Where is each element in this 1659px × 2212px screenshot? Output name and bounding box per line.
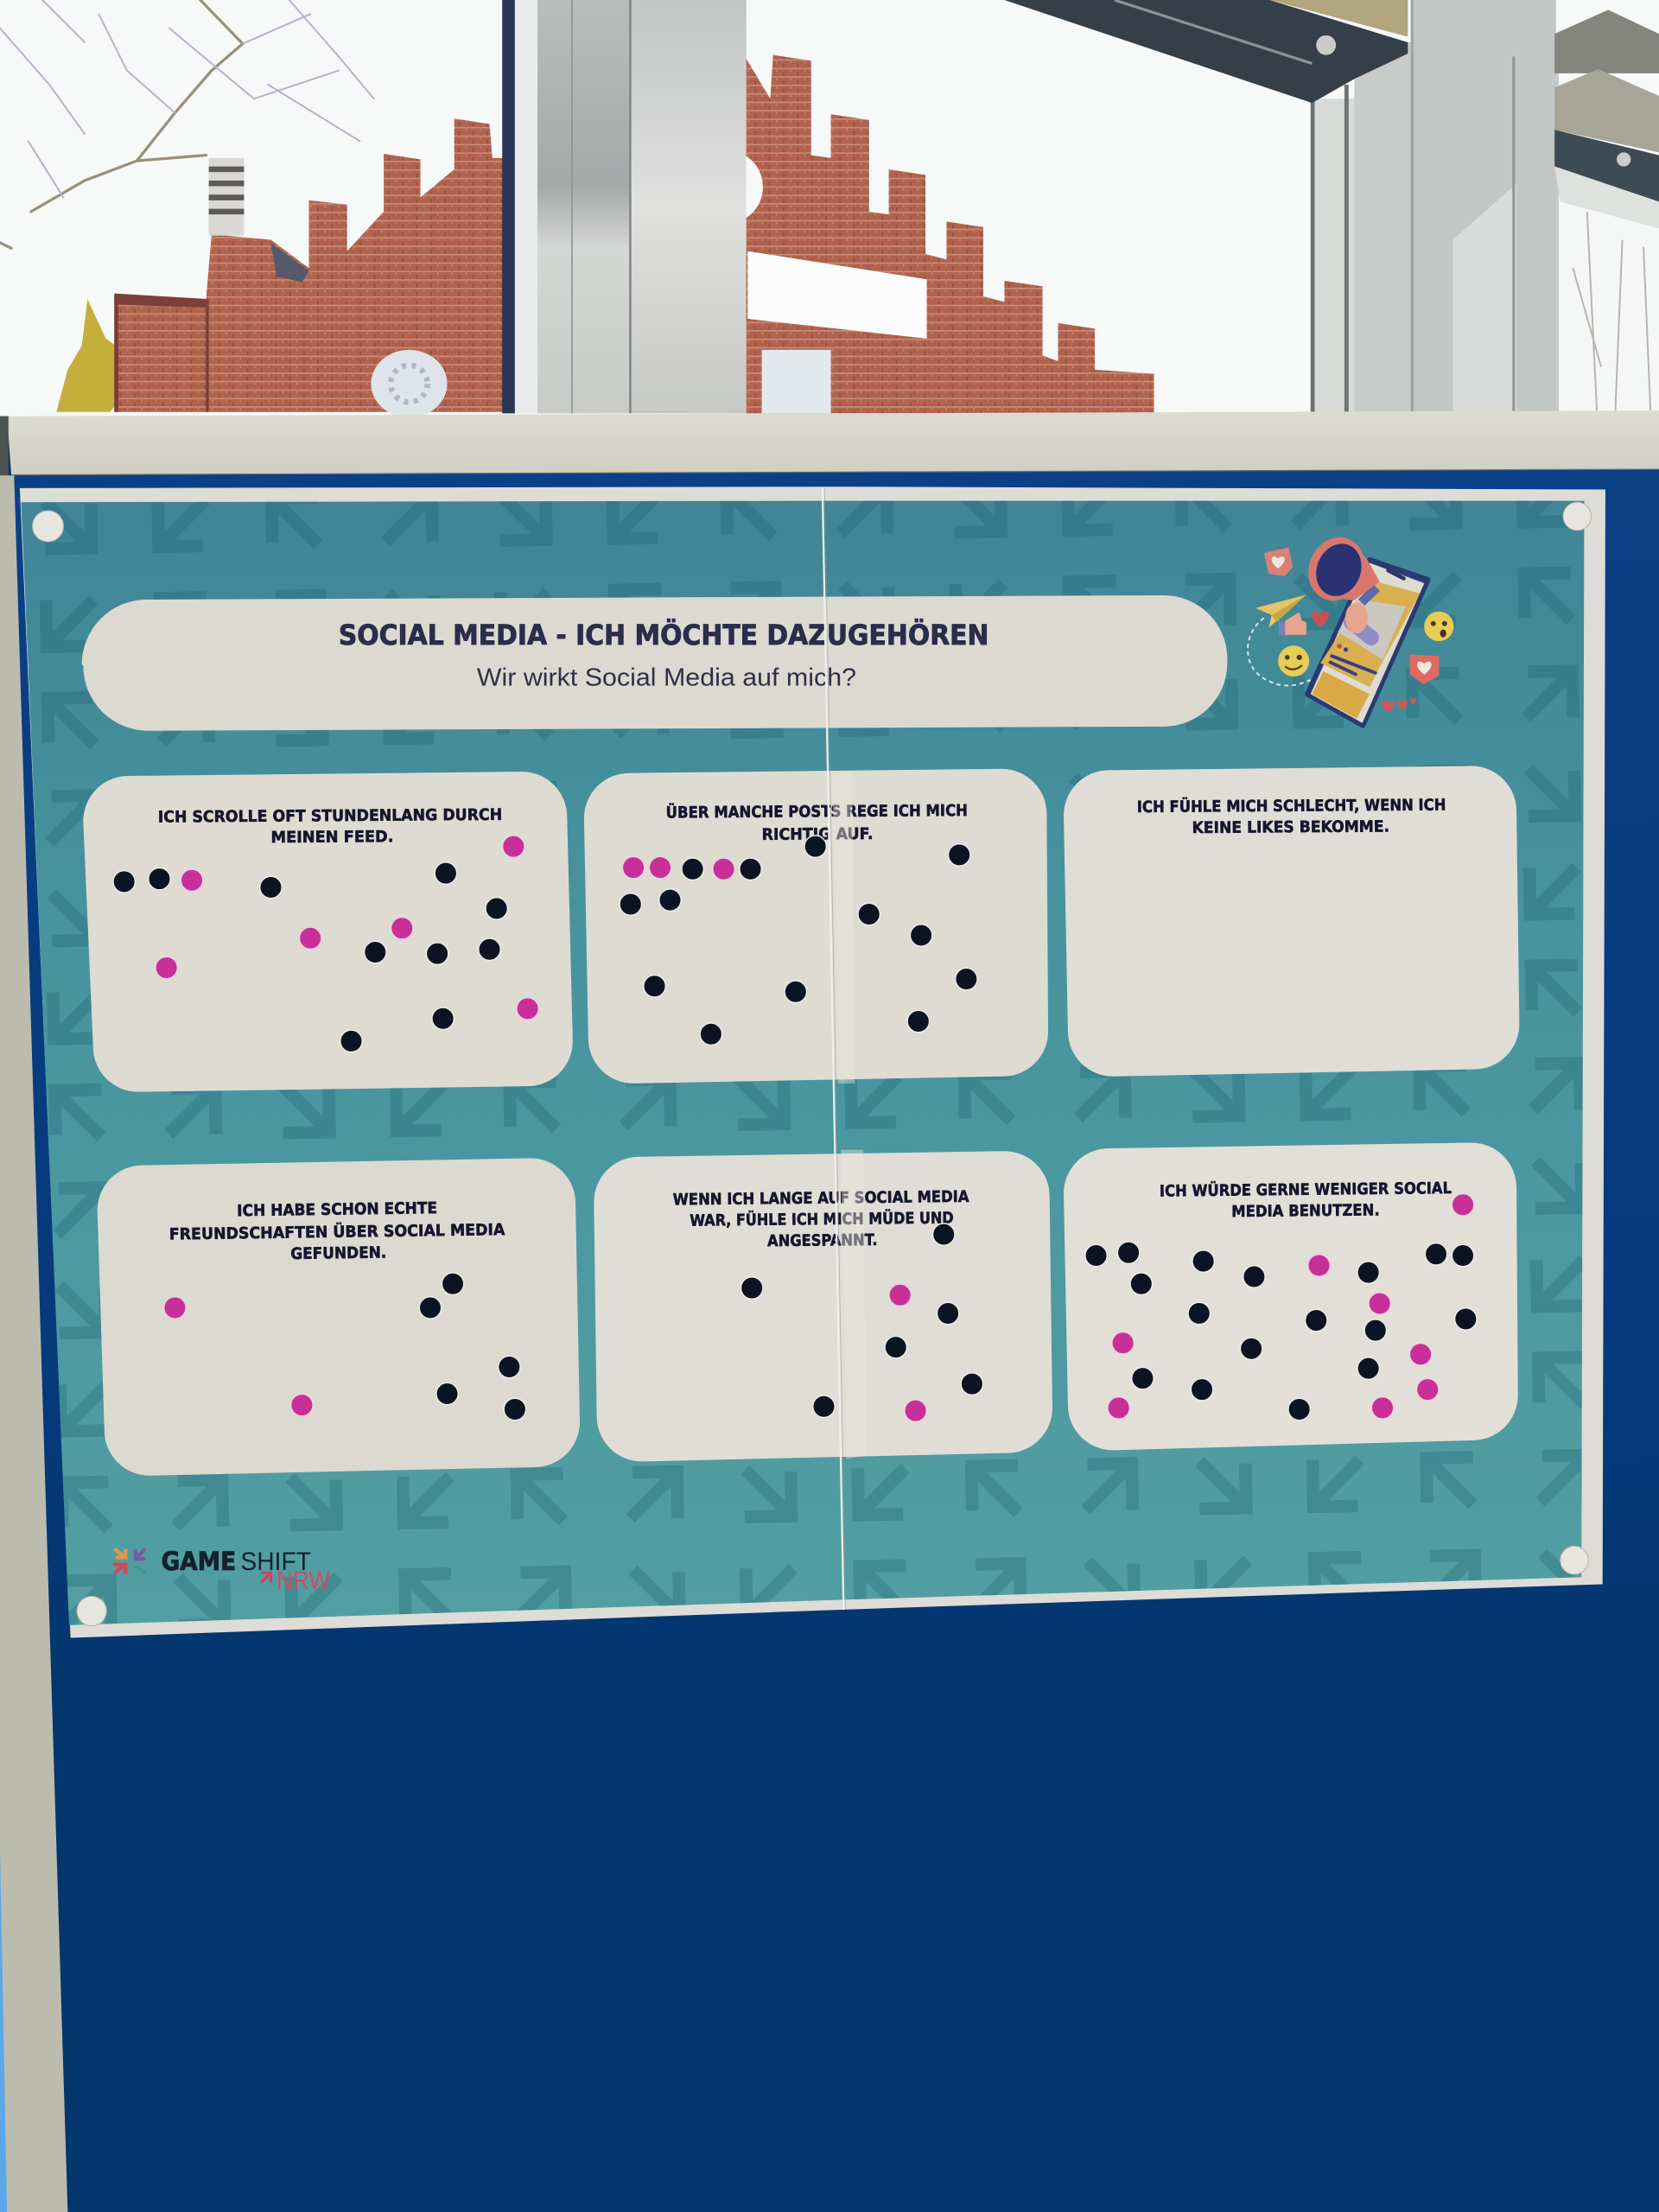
poster (20, 486, 1605, 1638)
panel heading: WENN ICH LANGE AUF SOCIAL MEDIA (673, 1188, 969, 1209)
icon: thumbs up (1279, 613, 1306, 635)
illustration: phone with megaphone and emojis (1248, 529, 1453, 725)
panel: getting upset (584, 769, 1048, 1084)
right ceiling light boxes (1554, 10, 1659, 413)
icon: phone (1307, 560, 1427, 725)
icon: surprised emoji (1424, 612, 1453, 641)
window sill (0, 410, 1659, 480)
panel: scrolling (83, 772, 573, 1092)
pink dots (164, 1297, 313, 1416)
poster paper margin (20, 486, 1605, 1638)
panel heading (1137, 796, 1446, 837)
title panel (82, 595, 1227, 731)
panel heading: KEINE LIKES BEKOMME. (1192, 817, 1389, 837)
panel heading: FREUNDSCHAFTEN ÜBER SOCIAL MEDIA (169, 1220, 505, 1244)
panel heading (1160, 1179, 1452, 1221)
panel heading (673, 1188, 969, 1250)
icon: three small hearts (1382, 698, 1416, 712)
arched window (762, 350, 831, 413)
panel heading: ICH WÜRDE GERNE WENIGER SOCIAL (1160, 1179, 1452, 1201)
black dots (741, 1224, 983, 1417)
icon: megaphone (1299, 529, 1380, 609)
black dots (113, 862, 507, 1052)
black dots (419, 1273, 526, 1421)
icon: four-arrow logo mark (113, 1549, 145, 1574)
pink dots (156, 836, 538, 1020)
pin board felt (14, 470, 1659, 2212)
panel heading: GEFUNDEN. (290, 1244, 386, 1263)
panel heading: ANGESPANNT. (767, 1231, 878, 1250)
icon: hand with sleeve (1345, 602, 1371, 638)
left brick building (114, 118, 504, 412)
panel heading: ICH HABE SCHON ECHTE (237, 1199, 437, 1220)
subtitle text: Wir wirkt Social Media auf mich? (477, 664, 856, 691)
yellow tree (56, 299, 141, 412)
panel heading: WAR, FÜHLE ICH MICH MÜDE UND (690, 1209, 954, 1230)
icon: small red arrow (261, 1573, 270, 1583)
icon: paper plane (1255, 594, 1306, 628)
logo wordmark: GAME (162, 1547, 236, 1576)
striped chimney (209, 158, 244, 236)
icon: heart bubble left (1264, 547, 1293, 576)
bright reflection band (747, 251, 927, 339)
arrow pattern (21, 501, 1584, 1625)
right brick gable (745, 55, 1154, 413)
black dots (1085, 1242, 1477, 1421)
title text: SOCIAL MEDIA - ICH MÖCHTE DAZUGEHÖREN (339, 619, 988, 652)
icon: small heart (1312, 612, 1329, 627)
pink dots (1108, 1194, 1474, 1419)
icon: heart bubble right (1410, 655, 1439, 684)
logo wordmark: SHIFT (240, 1548, 311, 1576)
icon: dashed flight path (1248, 618, 1311, 685)
aluminium window frames (502, 0, 1559, 413)
pink dots (622, 856, 734, 880)
bare tree branches (0, 0, 374, 248)
pink dots (889, 1284, 926, 1421)
panel: tired and tense (594, 1151, 1052, 1461)
logo wordmark (162, 1547, 311, 1576)
window view with brick building (0, 0, 1659, 417)
panel heading (158, 806, 502, 847)
logo NRW text: NRW (276, 1567, 330, 1595)
pins (33, 502, 1592, 1626)
panel: real friendships (98, 1158, 580, 1476)
dark diagonal ceiling beam (1004, 0, 1408, 103)
panel: use less social media (1064, 1142, 1518, 1450)
panel heading: ICH SCROLLE OFT STUNDENLANG DURCH (158, 806, 502, 827)
black dots (620, 836, 977, 1045)
panel heading (169, 1199, 505, 1263)
teal poster background (21, 501, 1584, 1625)
panel heading (665, 801, 968, 844)
panel heading: RICHTIG AUF. (762, 825, 874, 844)
icon: smiling emoji (1278, 645, 1309, 677)
panel: no likes (1064, 766, 1519, 1077)
panel heading: ICH FÜHLE MICH SCHLECHT, WENN ICH (1137, 796, 1446, 817)
round rosette window (371, 350, 448, 417)
panel heading: MEINEN FEED. (270, 828, 394, 847)
centre seam between poster sheets (823, 488, 866, 1610)
panel heading: MEDIA BENUTZEN. (1231, 1201, 1380, 1221)
panel heading: ÜBER MANCHE POSTS REGE ICH MICH (665, 801, 968, 823)
logo: GameShift NRW (113, 1547, 330, 1595)
left post (0, 475, 67, 2212)
